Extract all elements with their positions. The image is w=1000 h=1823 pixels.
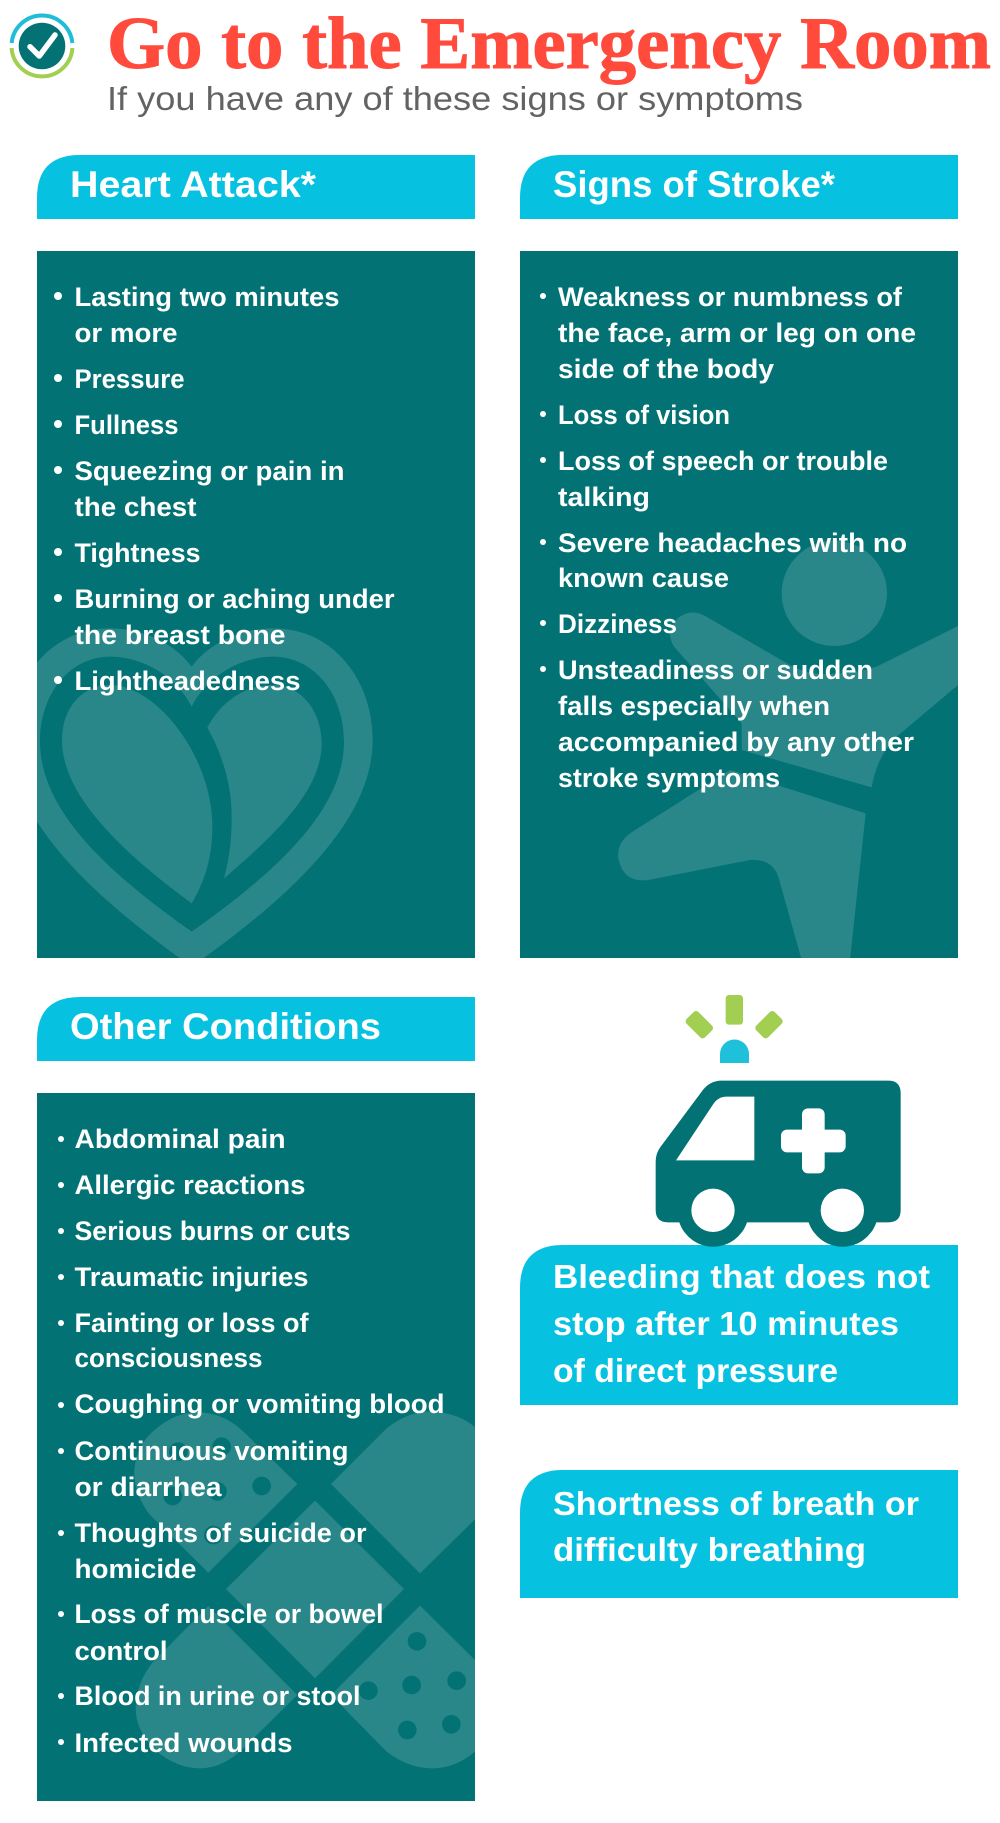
list: stroke symptoms: talking [558, 482, 650, 512]
list: heart attack symptoms: Lightheadedness [74, 666, 300, 696]
list: stroke symptoms: known cause [558, 563, 729, 593]
list: heart attack symptoms: Fullness [74, 410, 178, 440]
list: stroke symptoms: side of the body [558, 354, 774, 384]
list: other conditions: Thoughts of suicide or [74, 1518, 367, 1548]
icon: bandage watermark [134, 1412, 477, 1768]
logo: check mark badge [12, 16, 72, 76]
list: heart attack symptoms: Lasting two minutes [74, 282, 340, 312]
list: stroke symptoms: Dizziness [558, 609, 677, 639]
list: other conditions: Abdominal pain [74, 1124, 286, 1154]
callout: shortness of breath [520, 1470, 958, 1598]
heading: heart attack [37, 155, 475, 219]
list: heart attack symptoms: Squeezing or pain in [74, 456, 344, 486]
list: heart attack symptoms: the chest [74, 492, 196, 522]
list: stroke symptoms: Loss of vision [558, 400, 730, 430]
list: other conditions: Traumatic injuries [74, 1262, 308, 1292]
icon: falling person watermark [618, 541, 960, 960]
list: other conditions: consciousness [74, 1343, 262, 1373]
callout: bleeding [520, 1245, 958, 1405]
list: heart attack symptoms: Pressure [74, 364, 184, 394]
list: stroke symptoms: Unsteadiness or sudden [558, 655, 873, 685]
list: stroke symptoms: Weakness or numbness of [558, 282, 903, 312]
list: heart attack symptoms [54, 282, 395, 696]
list: other conditions: Continuous vomiting [74, 1436, 348, 1466]
list: stroke symptoms: the face, arm or leg on one [558, 318, 916, 348]
heading: signs of stroke [520, 155, 958, 219]
heading: other conditions: Other Conditions [70, 1006, 381, 1047]
list: other conditions: or diarrhea [74, 1472, 223, 1502]
heading: other conditions [37, 997, 475, 1061]
list: other conditions: Coughing or vomiting blood [74, 1389, 444, 1419]
list: stroke symptoms: accompanied by any other [558, 727, 915, 757]
callout: bleeding: stop after 10 minutes [553, 1305, 899, 1342]
list: other conditions: Allergic reactions [74, 1170, 306, 1200]
list: heart attack symptoms: the breast bone [74, 620, 286, 650]
list: stroke symptoms: stroke symptoms [558, 763, 780, 793]
list: other conditions: Infected wounds [74, 1728, 292, 1758]
icon: heart watermark [11, 628, 373, 967]
callout: bleeding: Bleeding that does not [553, 1258, 930, 1295]
panel: heart attack [11, 251, 475, 967]
list: other conditions: control [74, 1636, 168, 1666]
list: other conditions: Serious burns or cuts [74, 1216, 350, 1246]
list: other conditions: homicide [74, 1554, 196, 1584]
icon: ambulance with siren [656, 995, 901, 1247]
callout: bleeding: of direct pressure [553, 1352, 838, 1389]
list: other conditions: Fainting or loss of [74, 1308, 310, 1338]
panel: other conditions [37, 1093, 477, 1801]
heading: heart attack: Heart Attack* [70, 164, 317, 205]
callout: shortness of breath: difficulty breathing [553, 1531, 866, 1568]
list: heart attack symptoms: or more [74, 318, 178, 348]
heading: signs of stroke: Signs of Stroke* [553, 164, 836, 205]
list: heart attack symptoms: Burning or aching under [74, 584, 395, 614]
subtitle: If you have any of these signs or symptoms [107, 80, 803, 117]
list: other conditions [58, 1124, 444, 1758]
list: heart attack symptoms: Tightness [74, 538, 200, 568]
panel: signs of stroke [520, 251, 960, 960]
list: other conditions: Loss of muscle or bowel [74, 1599, 384, 1629]
callout: shortness of breath: Shortness of breath or [553, 1485, 919, 1522]
list: stroke symptoms: falls especially when [558, 691, 830, 721]
list: other conditions: Blood in urine or stool [74, 1681, 360, 1711]
title: Go to the Emergency Room [107, 3, 991, 85]
list: stroke symptoms: Severe headaches with no [558, 528, 907, 558]
list: stroke symptoms: Loss of speech or trouble [558, 446, 888, 476]
list: stroke symptoms [540, 282, 916, 793]
